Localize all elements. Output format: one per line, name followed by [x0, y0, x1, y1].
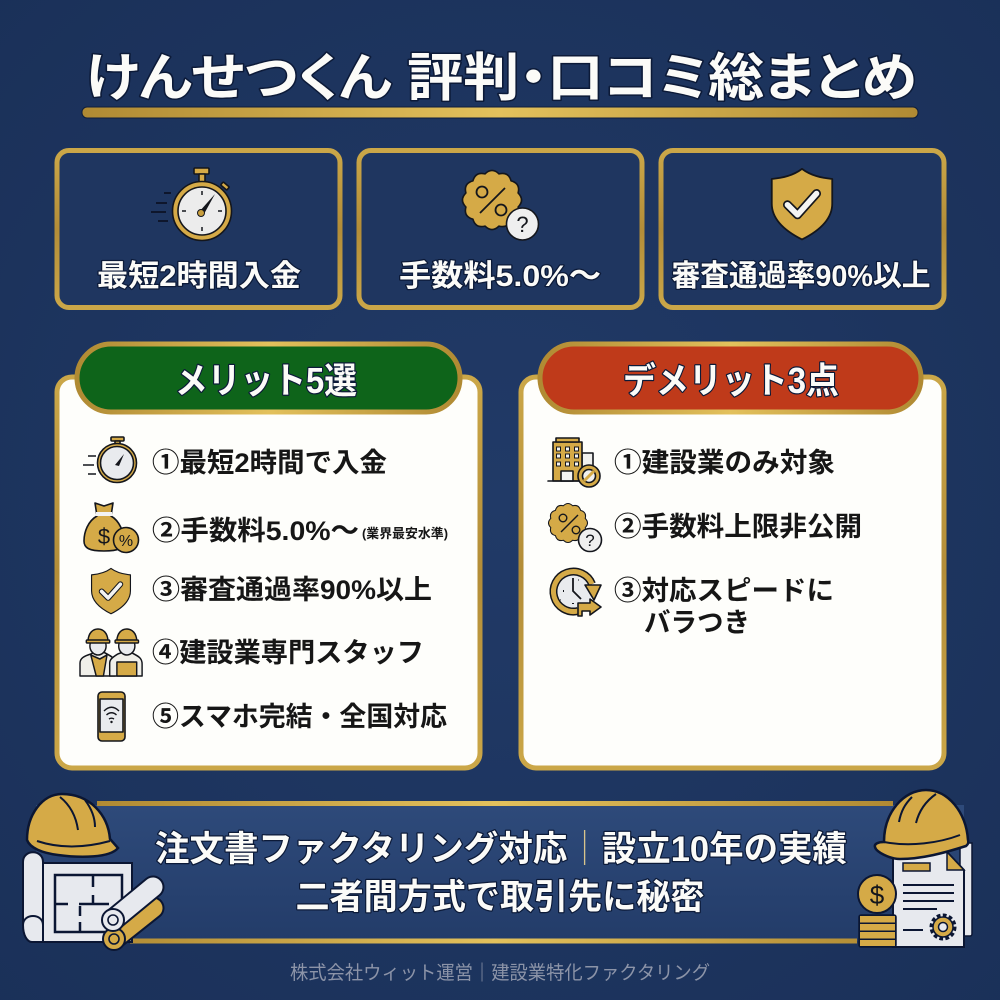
icon: smartphone: [98, 692, 125, 741]
card label: 手数料5.0%～: [399, 260, 601, 293]
merit 2: [152, 516, 448, 546]
banner text line 2: 二者間方式で取引先に秘密: [296, 878, 704, 917]
merit 5: ⑤スマホ完結・全国対応: [152, 702, 447, 732]
icon: clock arrows: [553, 572, 601, 616]
icon: percent badge: [462, 170, 538, 240]
heading: merits: メリット5選: [175, 360, 357, 401]
heading: demerits: [540, 344, 921, 412]
icon: percent badge: ?: [516, 212, 529, 237]
banner: [23, 790, 972, 950]
demerit 3: ③対応スピードに: [614, 576, 834, 606]
icon: shield small: [92, 568, 130, 614]
card label: 最短2時間入金: [97, 260, 301, 293]
title: けんせつくん 評判・口コミ総まとめ: [85, 50, 917, 108]
merit 2: (業界最安水準): [362, 526, 448, 541]
demerit 1: ①建設業のみ対象: [614, 448, 835, 478]
panel: merits: [57, 344, 480, 768]
icon: helmet and document: $: [870, 880, 885, 910]
banner text line 1: 注文書ファクタリング対応｜設立10年の実績: [155, 830, 847, 869]
icon: building: [548, 438, 600, 487]
icon: money bag: $: [98, 524, 110, 549]
footer: 株式会社ウィット運営｜建設業特化ファクタリング: [290, 962, 710, 984]
demerit 3: バラつき: [644, 608, 750, 638]
icon: percent question: ?: [585, 531, 595, 550]
icon: percent question: [548, 503, 602, 552]
merit 1: ①最短2時間で入金: [152, 448, 387, 478]
icon: helmet and blueprint: [23, 794, 153, 950]
panel: approval rate: [661, 150, 944, 308]
icon: helmet and document: [858, 790, 972, 947]
icon: money bag: [84, 503, 138, 552]
heading: merits: [77, 344, 460, 412]
demerit 2: ②手数料上限非公開: [614, 512, 862, 542]
heading: demerits: デメリット3点: [623, 360, 839, 401]
icon: shield: [772, 169, 832, 239]
icon: stopwatch: [151, 168, 232, 240]
demerit 3: [614, 576, 834, 638]
merit 2: ②手数料5.0%～: [152, 516, 359, 546]
icon: workers: [80, 629, 142, 676]
merit 4: ④建設業専門スタッフ: [152, 638, 424, 668]
merit 3: ③審査通過率90%以上: [152, 575, 432, 605]
icon: stopwatch small: [83, 437, 136, 482]
card label: 審査通過率90%以上: [672, 260, 930, 293]
panel: demerits: [521, 344, 944, 768]
panel: fastest deposit: [57, 150, 340, 308]
icon: money bag: %: [119, 533, 133, 550]
panel: fee: [359, 150, 642, 308]
